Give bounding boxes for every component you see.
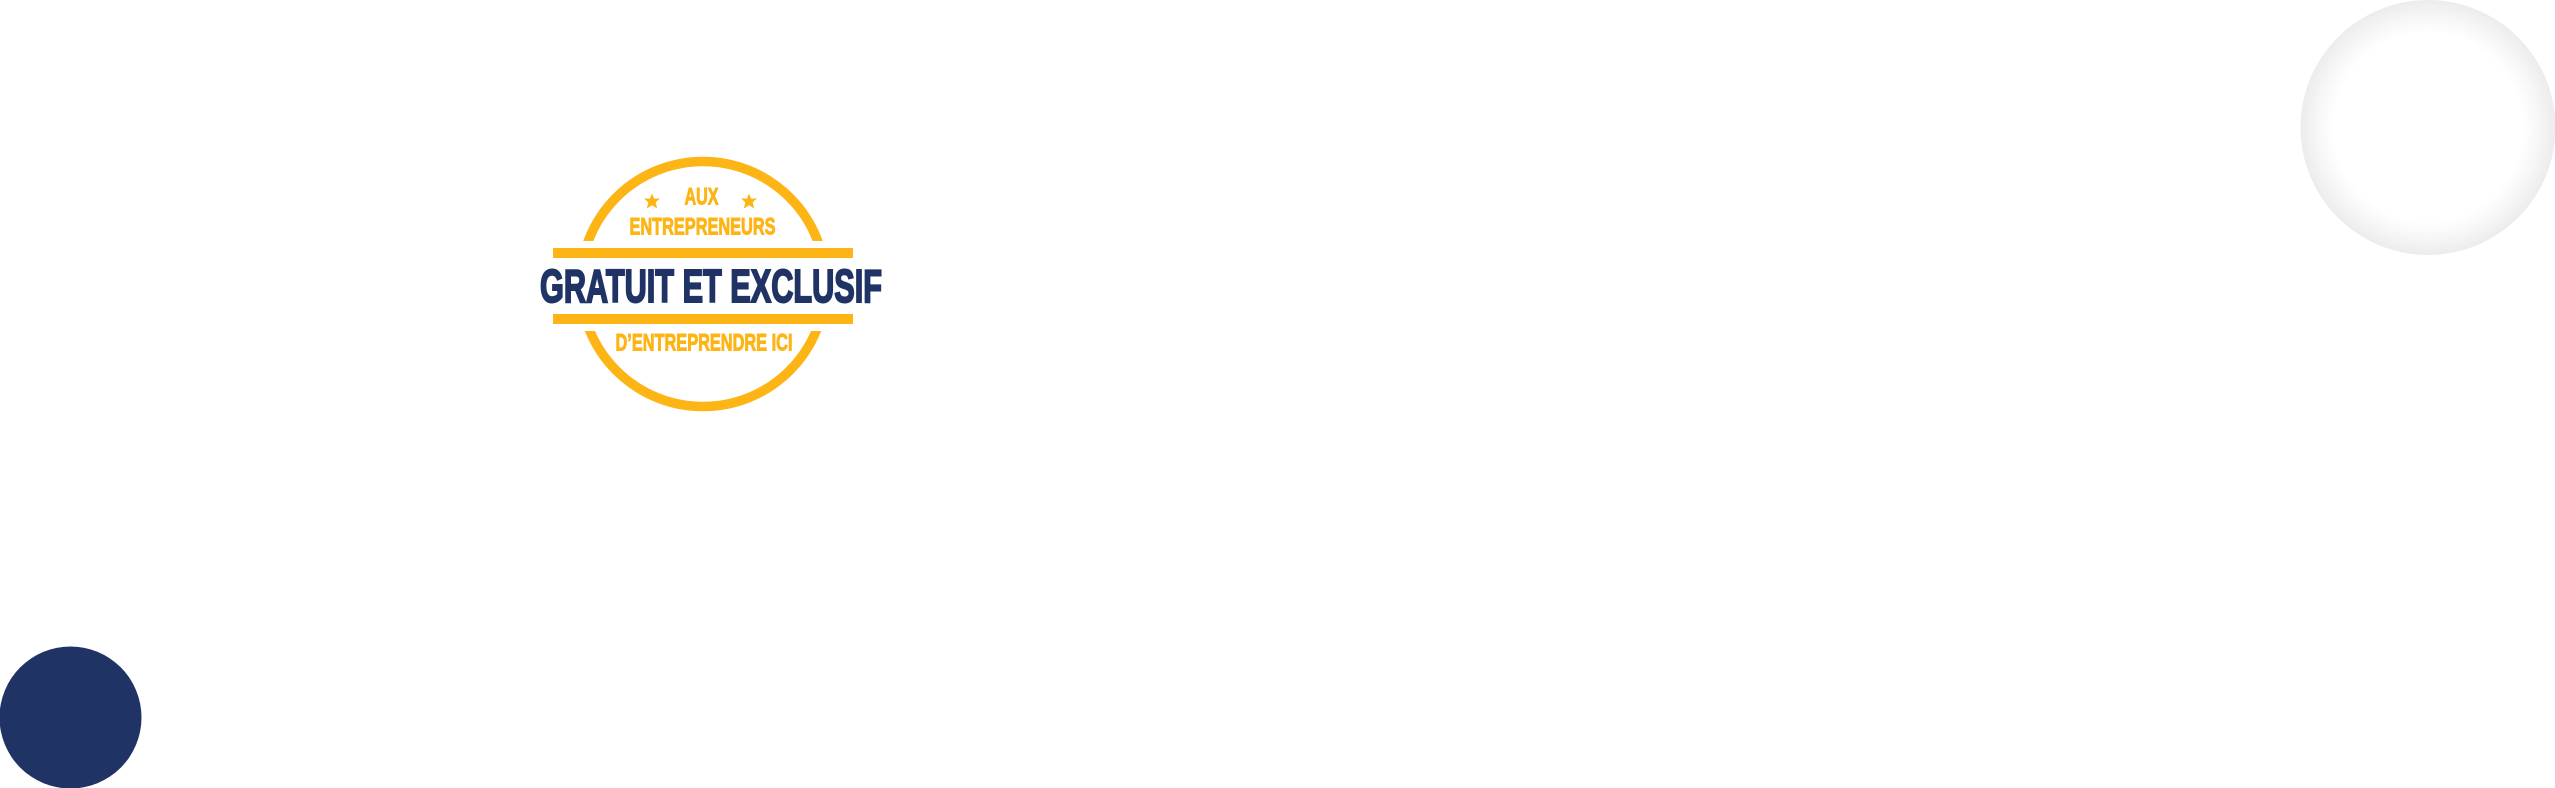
lower bar bbox=[553, 314, 853, 324]
upper bar bbox=[553, 248, 853, 258]
text: entrepreneurs: ENTREPRENEURS bbox=[630, 214, 776, 240]
icon: left star bbox=[644, 194, 660, 208]
decorative circle: navy bottom left bbox=[0, 646, 142, 788]
heading: gratuit et exclusif: GRATUIT ET EXCLUSIF bbox=[540, 260, 882, 312]
badge: gratuit et exclusif bbox=[540, 162, 882, 406]
text: aux: AUX bbox=[684, 184, 719, 210]
text: d'entreprendre ici: D’ENTREPRENDRE ICI bbox=[616, 330, 792, 356]
badge ring bbox=[580, 162, 826, 406]
icon: right star bbox=[741, 194, 757, 208]
decorative circle: grey bubble top right bbox=[2300, 0, 2555, 255]
